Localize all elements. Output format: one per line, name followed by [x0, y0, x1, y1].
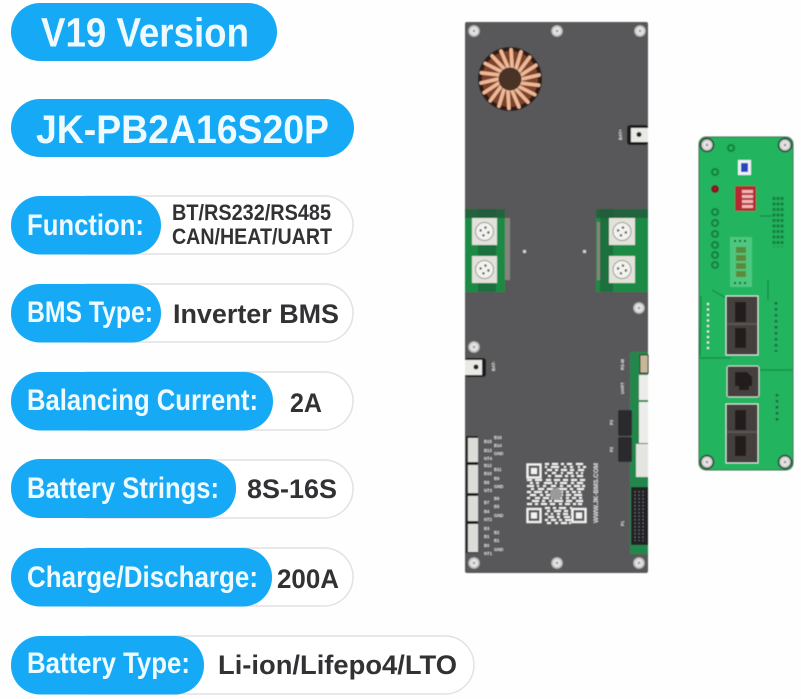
balance pin labels: GND [494, 451, 503, 456]
balance pin labels: GND [494, 513, 503, 518]
spec row: Battery Strings: 8S-16S [247, 474, 337, 504]
green terminal block [730, 237, 752, 287]
balance pin labels: B10 [484, 471, 492, 476]
balance lead connectors [466, 436, 478, 553]
BAT+ terminal [618, 125, 648, 145]
single RJ port [727, 366, 759, 397]
balance pin labels: GND [494, 484, 503, 489]
balance pin labels: B11 [494, 467, 502, 472]
balance pin labels: B8 [484, 480, 490, 485]
spec row: Function: Function: [27, 209, 144, 242]
balance pin labels: B9 [494, 476, 500, 481]
right connector labels: UART [620, 382, 625, 394]
balance pin labels: B6 [494, 496, 500, 501]
balance pin labels: B1 [484, 534, 490, 539]
balance pin labels: B2 [494, 530, 500, 535]
title pill: V19 Version [11, 3, 277, 61]
double RJ45 port upper [726, 296, 758, 355]
right connector labels: P1 [620, 520, 625, 526]
balance pin labels [484, 435, 503, 556]
LED and solder pads [712, 145, 734, 268]
title pill: V19 Version: V19 Version [41, 10, 249, 56]
right connector labels: P3 [609, 419, 614, 425]
circuit traces [699, 216, 793, 370]
blue switch [738, 160, 751, 175]
spec row: Balancing Current: 2A [290, 388, 322, 418]
spec row: Balancing Current [11, 372, 353, 430]
balance pin labels: NT4 [484, 456, 493, 461]
model pill: JK-PB2A16S20P: JK-PB2A16S20P [36, 108, 329, 152]
spec row: Battery Strings: Battery Strings: [27, 472, 219, 505]
balance pin labels: NT2 [484, 517, 493, 522]
spec row: Battery Type: Battery Type: [27, 647, 190, 680]
B- terminal: BAT- [491, 361, 496, 371]
balance pin labels: B1 [494, 538, 500, 543]
spec row: BMS Type [11, 284, 353, 342]
spec row: BMS Type: Inverter BMS [173, 299, 339, 329]
spec row: Balancing Current: Balancing Current: [27, 384, 258, 417]
mounting holes [468, 25, 646, 569]
balance pin labels: B5 [494, 504, 500, 509]
board markers [523, 250, 586, 253]
right connector labels: RS-M [620, 359, 625, 370]
balance pin labels: NT3 [484, 488, 493, 493]
spec row: Charge/Discharge: 200A [277, 564, 339, 594]
spec row: Battery Type [11, 636, 474, 694]
red DIP switch [735, 186, 756, 211]
website text: WWW.JK-BMS.COM [593, 463, 600, 523]
pin header dots [774, 197, 782, 247]
spec row: Battery Strings [11, 459, 353, 518]
spec row: Function: CAN/HEAT/UART [172, 224, 332, 249]
balance pin labels: B0 [484, 543, 490, 548]
spec row: Function [11, 196, 353, 254]
balance pin labels: B13 [484, 448, 492, 453]
spec row: Function: BT/RS232/RS485 [172, 200, 331, 225]
spec row: BMS Type: BMS Type: [27, 296, 153, 329]
BAT+ terminal: BAT+ [618, 129, 623, 140]
balance pin labels: B16 [494, 435, 502, 440]
right connector strip [618, 352, 648, 554]
balance pin labels: B4 [484, 509, 490, 514]
QR code [527, 464, 586, 523]
model pill: JK-PB2A16S20P [11, 99, 354, 157]
balance pin labels: GND [494, 547, 503, 552]
balance pin labels: B7 [484, 500, 490, 505]
balance pin labels: B14 [494, 443, 502, 448]
spec row: Charge/Discharge [11, 548, 353, 606]
icon: copper toroid inductor [478, 47, 542, 111]
spec row: Battery Type: Li-ion/Lifepo4/LTO [218, 650, 457, 680]
balance pin labels: B15 [484, 439, 492, 444]
balance pin labels: B12 [484, 463, 492, 468]
right power terminals [596, 209, 648, 292]
right connector labels [609, 359, 625, 526]
balance pin labels: B3 [484, 526, 490, 531]
B- terminal [465, 358, 496, 377]
main BMS board [465, 22, 648, 573]
add-on communication board [699, 137, 793, 470]
mounting holes [700, 138, 792, 468]
double RJ45 port lower [726, 404, 758, 463]
spec row: Charge/Discharge: Charge/Discharge: [27, 561, 258, 594]
left power terminals [465, 209, 510, 292]
balance pin labels: NT1 [484, 551, 493, 556]
right connector labels: P2 [609, 446, 614, 452]
